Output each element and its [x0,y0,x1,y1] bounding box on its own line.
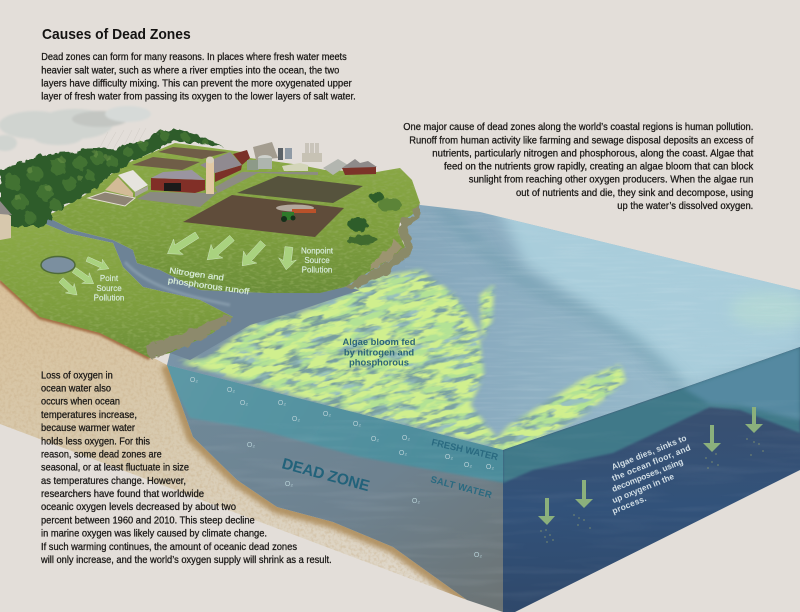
text block: intro: heavier salt water, such as where a river empties into the ocean, the two [41,65,340,76]
arrows: sinking algae [538,407,763,525]
text block: loss of oxygen: If such warming continues, the amount of oceanic dead zones [41,542,297,553]
illustration: ocean surface [160,200,800,455]
illustration: rocky cliffs [145,203,420,358]
illustration: south bank land with pond [0,224,233,358]
label: fresh water: FRESH WATER [430,437,499,463]
text block: loss of oxygen: ocean water also [41,384,111,394]
text block: intro: Dead zones can form for many reasons. In places where fresh water meets [41,52,347,63]
text block: loss of oxygen: seasonal, or at least fluctuate in size [41,463,189,474]
text block: human pollution: nutrients, particularly nitrogen and phosphorous, along the coast. Algae that [432,148,753,159]
text block: human pollution: sunlight from reaching other oxygen producers. When the algae run [469,175,753,186]
label: algae dies: the ocean floor, and [610,442,692,483]
text block: loss of oxygen: will only increase, and the world’s oxygen supply will shrink as a result. [40,555,332,566]
text block: loss of oxygen: occurs when ocean [41,397,120,408]
label: algae bloom: Algae bloom fed [343,336,416,347]
text block: loss of oxygen: percent between 1960 and 2010. This steep decline [41,515,255,526]
label: algae bloom: phosphorous [349,356,409,368]
label: dead zone: DEAD ZONE [280,455,371,495]
oxygen bubbles: O₂ [278,400,286,407]
text block: human pollution: out of nutrients and die, they sink and decompose, using [516,188,754,199]
icon: pond [41,256,75,274]
oxygen bubbles: O₂ [445,454,453,461]
oxygen bubbles: O₂ [402,435,410,442]
label: algae dies: process. [611,493,648,516]
illustration: farm fields [132,147,363,237]
label: nonpoint source pollution: Pollution [302,266,332,274]
label: salt water: SALT WATER [429,474,493,501]
label: algae bloom: by nitrogen and [344,346,414,358]
text block: human pollution: Runoff from human activity like farming and sewage disposal deposits an excess of [409,135,753,146]
text block: human pollution [403,122,754,212]
oxygen bubbles: O₂ [474,552,482,559]
text block: loss of oxygen: researchers have found that worldwide [41,489,204,500]
arrows: point source pollution [57,254,111,300]
text block: loss of oxygen: reason, some dead zones are [41,450,162,460]
oxygen bubbles: O₂ [464,462,472,469]
oxygen bubbles: O₂ [292,416,300,423]
decomposing algae particles [540,438,764,543]
illustration: sand cross-section [0,270,480,610]
label: point source pollution: Source [96,284,122,293]
oxygen bubbles: O₂ [412,498,420,505]
text block: human pollution: One major cause of dead zones along the world’s coastal regions is human pollution. [403,122,753,133]
text block: intro: layer of fresh water from passing its oxygen to the lower layers of salt water. [41,92,356,102]
label: nitrogen and phosphorous runoff: phosphorous runoff [167,276,251,296]
label: point source pollution: Point [100,274,119,283]
illustration: farm buildings [88,142,377,207]
illustration: small trees near cliff [346,192,402,245]
text block: human pollution: feed on the nutrients grow rapidly, creating an algae bloom that can block [444,162,754,172]
text block: intro: layers have difficulty mixing. This can prevent the more oxygenated upper [41,78,352,89]
illustration: forest [0,130,222,232]
text block: loss of oxygen: holds less oxygen. For this [41,436,150,447]
oxygen bubbles: O₂ [247,442,255,449]
illustration: river [43,215,360,360]
label: algae dies: decomposes, using [610,456,684,494]
oxygen bubbles: O₂ [486,464,494,471]
text block: loss of oxygen [40,370,332,566]
label: point source pollution: Pollution [94,294,124,302]
text block: loss of oxygen: in marine oxygen was likely caused by climate change. [41,529,267,540]
illustration: left farmhouse [0,201,12,240]
oxygen bubbles: O₂ [353,421,361,428]
label: nonpoint source pollution: Source [304,256,330,265]
illustration: algae bloom on surface [180,268,628,450]
oxygen bubbles: O₂ [371,436,379,443]
label: algae dies [595,433,703,516]
title: Causes of Dead Zones [42,26,191,43]
text block: human pollution: up the water’s dissolved oxygen. [617,201,753,212]
label: nitrogen and phosphorous runoff [167,266,252,296]
oxygen bubbles: O₂ [190,377,198,384]
label: algae dies: up oxygen in the [610,471,676,505]
illustration: farmland north bank [40,140,425,295]
illustration: rain cloud [0,106,151,165]
text block: loss of oxygen: oceanic oxygen levels decreased by about two [41,502,236,513]
left cross-section: fresh and salt water [160,360,510,612]
label: algae dies: Algae dies, sinks to [610,433,688,472]
oxygen bubbles: O₂ [285,481,293,488]
text block: intro [41,52,356,102]
oxygen bubbles: O₂ [227,387,235,394]
illustration: tractor [276,204,316,222]
oxygen bubbles: O₂ [323,411,331,418]
text block: loss of oxygen: Loss of oxygen in [41,370,113,381]
label: nonpoint source pollution: Nonpoint [301,246,334,256]
right cross-section: deep water [503,345,800,612]
text block: loss of oxygen: because warmer water [41,423,136,434]
text block: loss of oxygen: temperatures increase, [41,410,137,421]
text block: loss of oxygen: as temperatures change. However, [41,476,186,487]
oxygen bubbles: O₂ [399,450,407,457]
oxygen bubbles: O₂ [240,400,248,407]
label: nitrogen and phosphorous runoff: Nitrogen and [169,266,225,283]
arrows: nonpoint source pollution [163,227,298,272]
oxygen bubbles [190,377,494,559]
